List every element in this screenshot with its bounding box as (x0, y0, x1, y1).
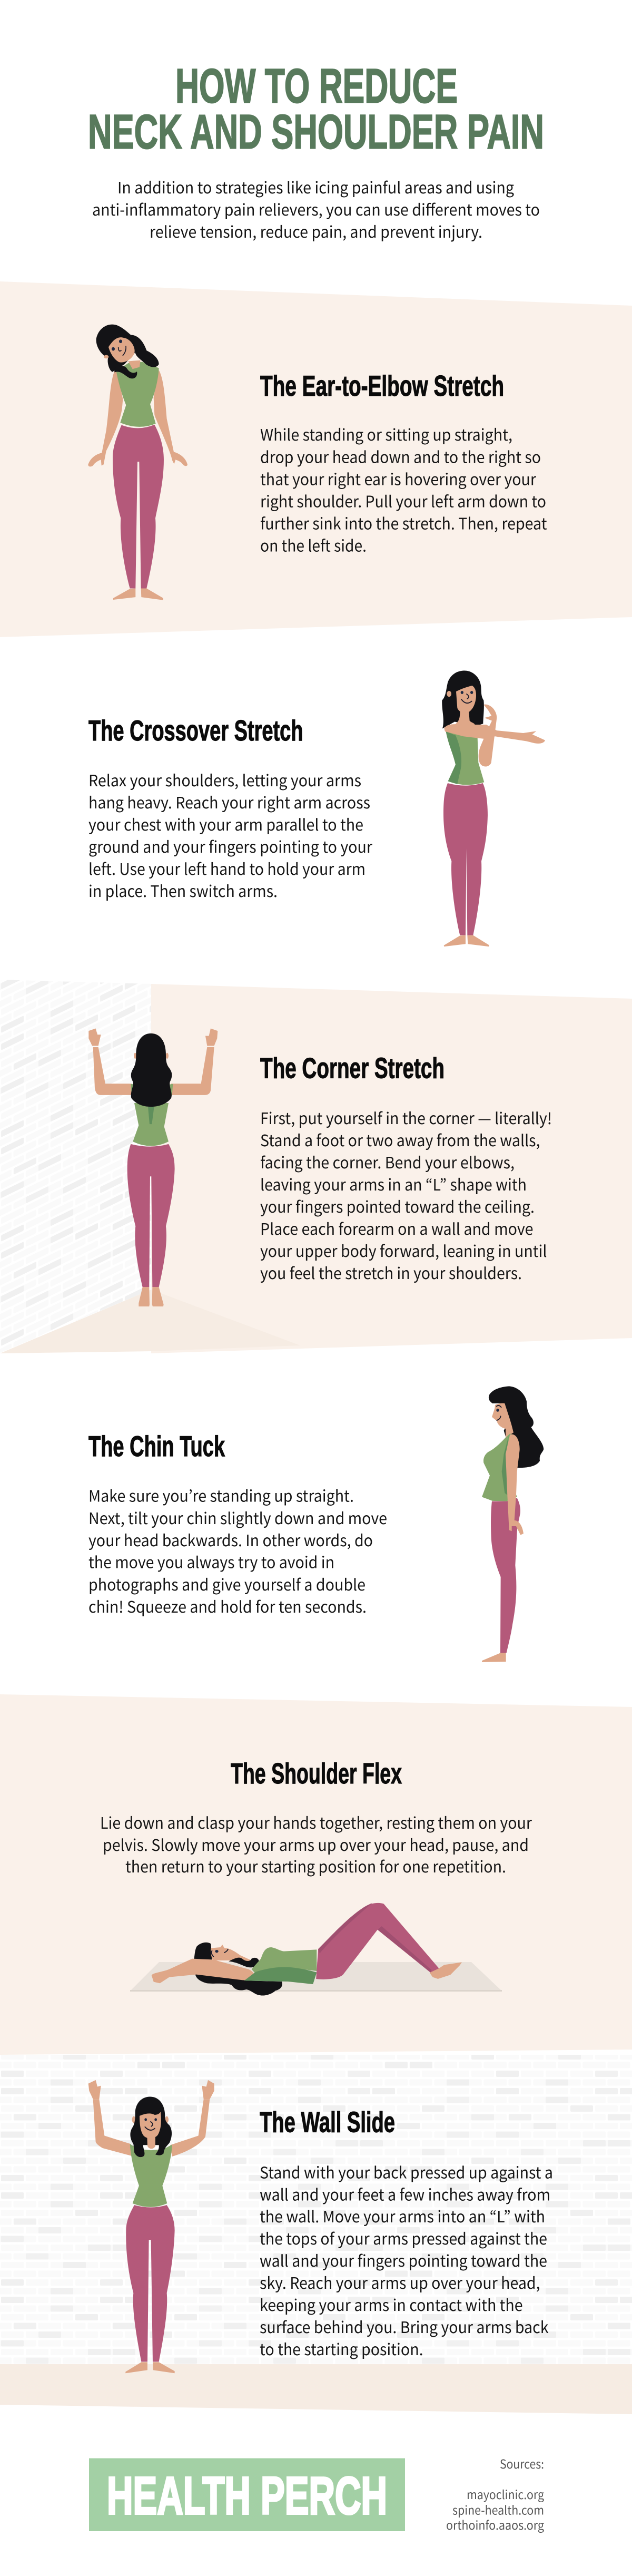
heading: The Crossover Stretch (88, 714, 303, 747)
body text: drop your head down and to the right so (260, 445, 541, 468)
body text: that your right ear is hovering over your (260, 467, 536, 490)
title (88, 59, 544, 159)
body text: the tops of your arms pressed against the (260, 2226, 547, 2249)
body text: the move you always try to avoid in (88, 1549, 334, 1573)
intro text: In addition to strategies like icing painful areas and using (117, 175, 514, 198)
panel: corner stretch (0, 980, 632, 1353)
body text: pelvis. Slowly move your arms up over your head, pause, and (103, 1832, 529, 1856)
body text: keeping your arms in contact with the (260, 2292, 523, 2316)
sources: spine-health.com (452, 2500, 544, 2518)
body text: right shoulder. Pull your left arm down to (260, 489, 546, 512)
body text: on the left side. (260, 533, 367, 557)
body text: While standing or sitting up straight, (260, 422, 512, 445)
figure: ear-to-elbow stretch (88, 325, 187, 600)
logo: health perch (89, 2458, 405, 2531)
body text: Next, tilt your chin slightly down and move (88, 1506, 387, 1529)
panel: chin tuck (88, 1386, 544, 1662)
intro text: relieve tension, reduce pain, and prevent injury. (150, 219, 482, 242)
sources: Sources: (500, 2454, 544, 2472)
body text: ground and your fingers pointing to your (88, 834, 372, 857)
body text: wall and your fingers pointing toward the (260, 2248, 547, 2271)
heading: The Shoulder Flex (231, 1757, 402, 1790)
body text: then return to your starting position for one repetition. (125, 1854, 506, 1877)
figure: crossover stretch (442, 670, 545, 947)
panel background (0, 281, 632, 637)
heading: The Chin Tuck (88, 1430, 225, 1462)
body text: your head backwards. In other words, do (88, 1528, 373, 1551)
body text: your fingers pointed toward the ceiling. (260, 1194, 535, 1217)
intro text (92, 175, 540, 242)
body text: you feel the stretch in your shoulders. (260, 1261, 522, 1284)
body text: to the starting position. (260, 2337, 423, 2360)
body text: further sink into the stretch. Then, repeat (260, 511, 547, 534)
body text: chin! Squeeze and hold for ten seconds. (88, 1594, 367, 1617)
body text (88, 768, 372, 902)
body text: left. Use your left hand to hold your arm (88, 856, 366, 880)
brick wall (0, 980, 151, 1353)
panel: wall slide (0, 2055, 632, 2414)
body text (260, 1106, 552, 1284)
heading: The Ear-to-Elbow Stretch (260, 369, 504, 402)
title: HOW TO REDUCE (175, 59, 458, 113)
floor (0, 2364, 632, 2414)
body text (88, 1483, 387, 1617)
panel: shoulder flex (0, 1694, 632, 2055)
panel background (0, 1694, 632, 2055)
heading: The Corner Stretch (260, 1052, 445, 1085)
body text: in place. Then switch arms. (88, 879, 278, 902)
figure: corner stretch (88, 1028, 218, 1306)
sources (446, 2454, 544, 2533)
figure: wall slide (88, 2080, 214, 2373)
body text: your chest with your arm parallel to the (88, 812, 363, 835)
body text: your upper body forward, leaning in until (260, 1238, 547, 1262)
body text: hang heavy. Reach your right arm across (88, 790, 370, 813)
body text: photographs and give yourself a double (88, 1572, 366, 1595)
body text: Stand with your back pressed up against a (260, 2160, 553, 2183)
body text: Stand a foot or two away from the walls, (260, 1128, 540, 1151)
body text (260, 2160, 553, 2360)
panel: crossover stretch (88, 670, 545, 947)
logo: health perch: HEALTH PERCH (107, 2466, 387, 2525)
body text: Make sure you’re standing up straight. (88, 1483, 354, 1506)
body text: sky. Reach your arms up over your head, (260, 2270, 540, 2294)
body text: surface behind you. Bring your arms back (260, 2315, 549, 2338)
body text (100, 1810, 532, 1877)
body text: Place each forearm on a wall and move (260, 1216, 533, 1240)
exercise mat (130, 1962, 502, 1992)
body text: Lie down and clasp your hands together, resting them on your (100, 1810, 532, 1833)
panel background (151, 984, 632, 1353)
heading: The Wall Slide (260, 2106, 395, 2139)
floor (0, 1290, 300, 1353)
sources: mayoclinic.org (467, 2485, 544, 2503)
figure: shoulder flex (152, 1903, 462, 1996)
sources: orthoinfo.aaos.org (446, 2515, 544, 2533)
body text: leaving your arms in an “L” shape with (260, 1172, 527, 1195)
body text: facing the corner. Bend your elbows, (260, 1150, 515, 1173)
body text: First, put yourself in the corner — literally! (260, 1106, 552, 1129)
intro text: anti-inflammatory pain relievers, you can use different moves to (92, 197, 540, 220)
panel: ear-to-elbow stretch (0, 281, 632, 637)
figure: chin tuck (482, 1386, 544, 1662)
body text: Relax your shoulders, letting your arms (88, 768, 361, 791)
body text: the wall. Move your arms into an “L” with (260, 2204, 545, 2227)
brick wall (0, 2055, 632, 2364)
body text (260, 422, 547, 557)
body text: wall and your feet a few inches away from (260, 2182, 550, 2205)
